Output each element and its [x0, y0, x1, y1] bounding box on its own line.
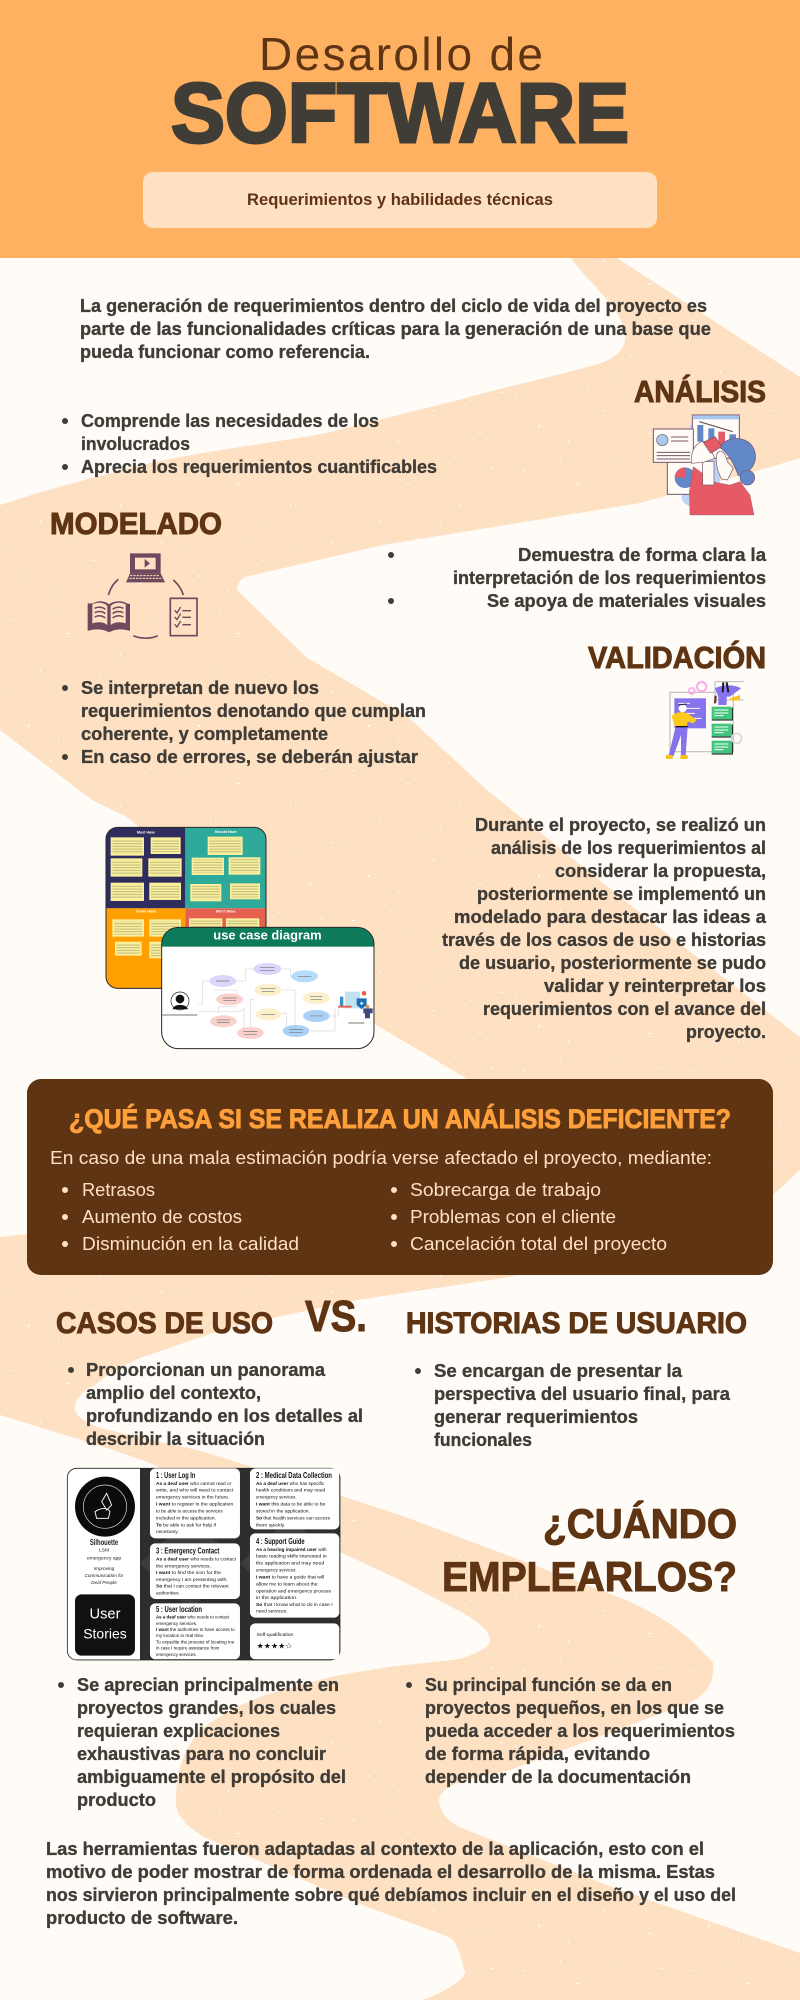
historias de usuario usage	[406, 1674, 735, 1787]
consequences list left	[62, 1180, 299, 1254]
casos de uso usage: proyectos grandes, los cuales	[77, 1697, 336, 1718]
figure: user stories card: 1 : User Log In	[156, 1470, 195, 1480]
heading: casos de uso: CASOS DE USO	[56, 1307, 273, 1340]
validación bullets	[62, 677, 426, 767]
figure: user stories card: LSM	[99, 1548, 109, 1554]
análisis bullets: involucrados	[81, 433, 190, 454]
summary paragraph: modelado para destacar las ideas a	[454, 906, 767, 927]
figure: user stories card: the emergency services.	[156, 1563, 211, 1568]
consequences list left: Disminución en la calidad	[82, 1234, 299, 1254]
figure: user stories card: 3 : Emergency Contact	[156, 1545, 219, 1555]
figure: user stories card: Silhouette	[90, 1537, 118, 1547]
figure: user stories card: As a hearing impaired user with	[256, 1547, 327, 1552]
figure: user stories card: authorities.	[156, 1591, 180, 1596]
panel heading: ¿QUÉ PASA SI SE REALIZA UN ANÁLISIS DEFICIENTE?	[69, 1103, 731, 1134]
story cards	[150, 1468, 339, 1659]
figure: user stories card: to be able to access the services	[156, 1509, 223, 1514]
figure: user stories card: As a deaf user who has specific	[256, 1481, 325, 1486]
closing paragraph: Las herramientas fueron adaptadas al contexto de la aplicación, esto con el	[46, 1838, 704, 1859]
intro paragraph: pueda funcionar como referencia.	[80, 341, 370, 362]
análisis bullets: Comprende las necesidades de los	[81, 410, 379, 431]
figure: user stories card: So that I can contact the relevant	[156, 1584, 229, 1589]
subtitle box	[143, 172, 657, 228]
summary paragraph: proyecto.	[686, 1021, 766, 1042]
figure: user stories card: Stories	[83, 1625, 127, 1641]
figure: user stories card: So that health services can access	[256, 1515, 331, 1520]
consequences list left: Aumento de costos	[82, 1207, 242, 1227]
consequences list right: Sobrecarga de trabajo	[410, 1180, 601, 1200]
figure: user stories card: emergency services.	[156, 1652, 197, 1657]
panel: análisis deficiente	[27, 1079, 773, 1275]
figure: user stories card: Self-qualification	[257, 1632, 294, 1637]
modelado bullets: Se apoya de materiales visuales	[487, 590, 766, 611]
figure: user stories card: basic reading skills interested in	[256, 1554, 327, 1559]
figure: user stories card: allow me to learn about the	[256, 1581, 318, 1586]
casos de uso usage: Se aprecian principalmente en	[77, 1674, 339, 1695]
consequences list right	[391, 1180, 667, 1254]
figure: user stories card: emergency services.	[256, 1495, 297, 1500]
figure: user stories card: them quickly.	[256, 1522, 285, 1527]
figure: user stories card	[67, 1468, 340, 1660]
historias de usuario description: Se encargan de presentar la	[434, 1360, 683, 1381]
heading: cuándo emplearlos	[442, 1500, 737, 1600]
figure: user stories card: 2 : Medical Data Collection	[256, 1470, 332, 1480]
historias de usuario description: funcionales	[434, 1429, 532, 1450]
figure: user stories card: 4 : Support Guide	[256, 1536, 305, 1546]
figure: user stories card: Communication for	[84, 1573, 124, 1578]
casos de uso description	[68, 1359, 363, 1449]
casos de uso description: describir la situación	[86, 1428, 265, 1449]
subtitle box: Requerimientos y habilidades técnicas	[247, 190, 553, 209]
panel: use case diagram	[162, 927, 374, 1049]
figure: user stories card: need services.	[256, 1609, 288, 1614]
panel: MoSCoW board: Won't Have	[216, 909, 236, 913]
heading: vs: VS.	[305, 1292, 367, 1341]
icon: modelado cycle	[88, 553, 197, 638]
análisis bullets: Aprecia los requerimientos cuantificables	[81, 456, 437, 477]
validación bullets: requerimientos denotando que cumplan	[81, 700, 426, 721]
panel: use case diagram: use case diagram	[213, 928, 322, 942]
summary paragraph: de usuario, posteriormente se pudo	[459, 952, 766, 973]
summary paragraph: considerar la propuesta,	[555, 860, 766, 881]
figure: user stories card: Improving	[94, 1566, 115, 1571]
figure: user stories card: emergency I am presenting with.	[156, 1577, 228, 1582]
heading: modelado: MODELADO	[50, 506, 222, 541]
figure: user stories card: health conditions and may need	[256, 1488, 326, 1493]
figure: user stories card: I want this data to be able to be	[256, 1502, 326, 1507]
análisis bullets	[62, 410, 437, 477]
figure: user stories card: As a deaf user who needs to contact	[156, 1614, 230, 1619]
historias de usuario description: generar requerimientos	[434, 1406, 638, 1427]
casos de uso description: amplio del contexto,	[86, 1382, 261, 1403]
intro paragraph: parte de las funcionalidades críticas para la generación de una base que	[80, 318, 711, 339]
figure: user stories card: To be able to ask for help if	[156, 1522, 217, 1527]
figure: user stories card: emergency services.	[156, 1621, 197, 1626]
figure: user stories card: in case I require assistance from	[156, 1646, 219, 1651]
figure: user stories card: To expedite the process of locating me	[156, 1639, 235, 1644]
figure: user stories card: emergency services in the future.	[156, 1495, 229, 1500]
panel: MoSCoW board: Must Have	[137, 831, 155, 835]
figure: user stories card: stored in the application.	[256, 1509, 310, 1514]
heading: validación: VALIDACIÓN	[588, 639, 766, 675]
heading: análisis: ANÁLISIS	[634, 374, 766, 409]
icon: woman analysing charts	[653, 415, 756, 515]
summary paragraph: través de los casos de uso e historias	[442, 929, 766, 950]
historias de usuario usage: de forma rápida, evitando	[425, 1743, 650, 1764]
figure: user stories card: in the application.	[256, 1595, 298, 1600]
figure: user stories card: emergency services.	[256, 1568, 297, 1573]
historias de usuario description	[415, 1360, 731, 1450]
heading: cuándo emplearlos: EMPLEARLOS?	[442, 1553, 737, 1600]
figure: user stories card: So that I know what to do in case I	[256, 1602, 333, 1607]
summary paragraph: Durante el proyecto, se realizó un	[475, 814, 766, 835]
historias de usuario usage: pueda acceder a los requerimientos	[425, 1720, 735, 1741]
casos de uso usage	[58, 1674, 346, 1810]
summary paragraph: análisis de los requerimientos al	[491, 837, 766, 858]
casos de uso usage: requieran explicaciones	[77, 1720, 280, 1741]
silhouette logo	[75, 1477, 135, 1537]
figure: user stories card: my location in real time.	[156, 1633, 204, 1638]
icon: validation checklist person	[666, 682, 744, 759]
consequences list right: Cancelación total del proyecto	[410, 1234, 667, 1254]
summary paragraph: requerimientos con el avance del	[483, 998, 766, 1019]
panel intro: En caso de una mala estimación podría verse afectado el proyecto, mediante:	[50, 1148, 712, 1168]
title: Desarollo de	[259, 28, 543, 80]
closing paragraph	[46, 1838, 736, 1928]
title	[171, 28, 629, 160]
figure: user stories card: emergency app	[87, 1555, 121, 1561]
intro paragraph: La generación de requerimientos dentro del ciclo de vida del proyecto es	[80, 295, 707, 316]
validación bullets: En caso de errores, se deberán ajustar	[81, 746, 418, 767]
historias de usuario usage: proyectos pequeños, en los que se	[425, 1697, 724, 1718]
figure: user stories card: I want to register in the application	[156, 1502, 234, 1507]
intro paragraph	[80, 295, 711, 362]
figure: user stories card: the application and may need	[256, 1561, 325, 1566]
summary paragraph	[442, 814, 767, 1042]
casos de uso description: profundizando en los detalles al	[86, 1405, 363, 1426]
figure: user stories card: ★★★★☆	[257, 1642, 292, 1651]
panel: MoSCoW board: Could Have	[136, 910, 156, 914]
casos de uso usage: ambiguamente el propósito del	[77, 1766, 346, 1787]
figure: user stories card: 5 : User location	[156, 1604, 202, 1614]
figure: user stories card: included in the application.	[156, 1515, 216, 1520]
figure: user stories card: Deaf People	[91, 1580, 117, 1585]
modelado bullets: interpretación de los requerimientos	[453, 567, 766, 588]
summary paragraph: validar y reinterpretar los	[544, 975, 766, 996]
modelado bullets: Demuestra de forma clara la	[518, 544, 767, 565]
figure: user stories card: I want the authorities to have access to	[156, 1627, 235, 1632]
modelado bullets	[388, 544, 767, 611]
figure: user stories card: As a deaf user who needs to contact	[156, 1557, 237, 1562]
panel: MoSCoW board	[106, 827, 266, 988]
validación bullets: coherente, y completamente	[81, 723, 328, 744]
figure: user stories card: I want to find the icon for the	[156, 1570, 221, 1575]
closing paragraph: nos sirvieron principalmente sobre qué debíamos incluir en el diseño y el uso del	[46, 1884, 736, 1905]
heading: cuándo emplearlos: ¿CUÁNDO	[543, 1500, 737, 1547]
historias de usuario usage: depender de la documentación	[425, 1766, 691, 1787]
figure: MoSCoW board and use case diagram	[106, 827, 374, 1049]
header band	[0, 0, 800, 258]
title: SOFTWARE	[171, 66, 629, 160]
heading: historias de usuario: HISTORIAS DE USUARIO	[406, 1307, 747, 1340]
casos de uso usage: producto	[77, 1789, 156, 1810]
figure: user stories card: As a deaf user who cannot read or	[156, 1481, 232, 1486]
consequences list left: Retrasos	[82, 1180, 155, 1200]
figure: user stories card: operation and emergency process	[256, 1588, 332, 1593]
panel: MoSCoW board: Should Have	[215, 830, 237, 834]
closing paragraph: producto de software.	[46, 1907, 238, 1928]
summary paragraph: posteriormente se implementó un	[477, 883, 766, 904]
historias de usuario usage: Su principal función se da en	[425, 1674, 672, 1695]
casos de uso usage: exhaustivas para no concluir	[77, 1743, 326, 1764]
historias de usuario description: perspectiva del usuario final, para	[434, 1383, 731, 1404]
casos de uso description: Proporcionan un panorama	[86, 1359, 326, 1380]
validación bullets: Se interpretan de nuevo los	[81, 677, 319, 698]
figure: user stories card: necessary.	[156, 1529, 179, 1534]
figure: user stories card: I want to have a guide that will	[256, 1574, 324, 1579]
closing paragraph: motivo de poder mostrar de forma ordenada el desarrollo de la misma. Estas	[46, 1861, 715, 1882]
figure: user stories card: User	[90, 1606, 121, 1622]
figure: user stories card: write, and who will need to contact	[156, 1488, 234, 1493]
consequences list right: Problemas con el cliente	[410, 1207, 616, 1227]
